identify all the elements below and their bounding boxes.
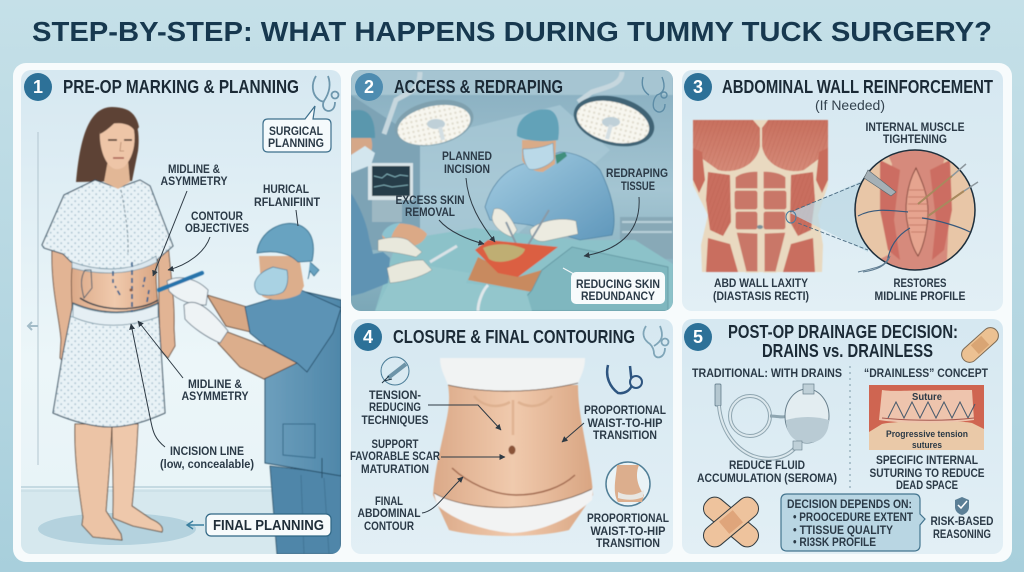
labels: panel 1: CONTOUR [191,211,244,223]
label: risk-based reasoning: RISK-BASED [930,516,994,528]
badge 1: 1 [33,77,43,97]
panel 5: post-op drainage decision [682,319,1003,554]
labels: panel 2: EXCESS SKIN [396,195,464,207]
labels: panel 3: INTERNAL MUSCLE [866,122,965,134]
illustration: surgical drain [715,384,829,459]
icon: bandage [958,324,1002,366]
labels: panel 2 [396,151,668,219]
callout: reducing skin redundancy [571,272,665,304]
labels: panel 5: REDUCE FLUID [729,460,805,472]
callout: decision factors: • RI3SK PROFILE [793,537,876,549]
callout: reducing skin redundancy: REDUNDANCY [581,291,655,303]
labels: panel 1: HURICAL [263,184,309,196]
panel 1: pre-op marking and planning [21,70,341,554]
label: risk-based reasoning: REASONING [933,529,991,541]
labels: panel 2: REMOVAL [405,207,455,219]
icon: stethoscope 2 [642,77,667,112]
illustration: progressive tension sutures [869,385,984,450]
labels: panel 4 [350,390,669,550]
labels: panel 2: PLANNED [442,151,492,163]
illustration: surgeon [159,223,341,554]
labels: panel 4: SUPPORT [372,439,418,451]
callout: reducing skin redundancy: REDUCING SKIN [576,279,660,291]
labels: panel 1: RFLANIFIINT [254,197,320,209]
labels: panel 4: FINAL [375,496,403,508]
zoom connector [786,178,868,252]
callout: decision factors: • TTISSUE QUALITY [793,525,893,537]
illustration: abdominal muscles [693,120,828,272]
labels: panel 1: ASYMMETRY [160,176,228,188]
labels: panel 3: MIDLINE PROFILE [874,291,966,303]
badge 3: 3 [693,77,703,97]
labels: panel 3: RESTORES [894,278,947,290]
badge 5: 5 [693,327,703,347]
labels: panel 4: PROPORTIONAL [587,513,669,525]
labels: panel 3: ABD WALL LAXITY [714,278,808,290]
labels: panel 5 [697,455,985,492]
badge 2 [355,73,383,101]
labels: panel 1: (low, concealable) [160,459,254,471]
labels: panel 1: ASYMMETRY [182,391,249,403]
labels: panel 4: TENSION- [369,390,421,402]
heading 4: CLOSURE & FINAL CONTOURING [393,327,635,347]
callout: decision factors: • PROOCEDURE EXTENT [793,512,913,524]
column headings: TRADITIONAL: WITH DRAINS [692,368,842,380]
callout: final planning: FINAL PLANNING [213,518,324,534]
badge 2: 2 [364,77,374,97]
label: risk-based reasoning [930,516,994,541]
badge 5 [684,323,712,351]
labels: panel 5: SPECIFIC INTERNAL [876,455,978,467]
labels: panel 1: MIDLINE & [188,379,242,391]
badge 1 [24,73,52,101]
labels: panel 5: SUTURING TO REDUCE [870,468,985,480]
icon: crossed bandages [699,493,763,551]
icon: stethoscope 4 [643,326,668,357]
heading 5: DRAINS vs. DRAINLESS [762,341,933,361]
icon: stethoscope 1 [313,76,338,111]
panel 2: access and redraping [351,70,673,311]
arrows: panel 4 leaders [422,405,584,513]
heading 5: POST-OP DRAINAGE DECISION: [728,322,958,342]
illustration: muscle tightening inset [855,150,978,272]
illustration: patient [42,107,175,540]
labels: panel 1: OBJECTIVES [185,223,249,235]
heading 2: ACCESS & REDRAPING [394,77,563,97]
labels: panel 4: FAVORABLE SCAR [350,451,441,463]
callout: surgical planning: SURGICAL [269,126,323,138]
illustration: progressive tension sutures: Suture [912,392,942,403]
labels: panel 3: TIGHTENING [883,134,947,146]
column headings [692,368,988,380]
badge 4: 4 [363,327,373,347]
badge 4 [354,323,382,351]
labels: panel 4: WAIST-TO-HIP [588,418,663,430]
callout: surgical planning [263,106,331,152]
labels: panel 1 [160,164,320,471]
callout: final planning [206,514,331,536]
column headings: “DRAINLESS” CONCEPT [864,368,988,380]
arrows: panel 2 leaders [439,178,639,279]
icon: waist inset [606,462,650,506]
callout: surgical planning: PLANNING [268,138,324,150]
heading 5 [728,322,958,361]
labels: panel 4: ABDOMINAL [358,508,420,520]
icon: check [955,497,969,515]
labels: panel 1: MIDLINE & [168,164,220,176]
labels: panel 1: INCISION LINE [170,446,244,458]
labels: panel 5: ACCUMULATION (SEROMA) [697,473,837,485]
labels: panel 4: WAIST-TO-HIP [590,526,666,538]
badge 3 [684,73,712,101]
labels: panel 3 [713,122,966,303]
labels: panel 4: CONTOUR [364,521,415,533]
icon: stethoscope dark [607,365,642,393]
illustration: progressive tension sutures: sutures [912,440,942,450]
operating room scene [351,70,673,311]
labels: panel 4: MATURATION [361,464,429,476]
subtitle: (If Needed) [815,97,885,113]
labels: panel 3: (DIASTASIS RECTI) [713,291,809,303]
labels: panel 2: INCISION [444,164,490,176]
icon: surgical tool [381,357,409,385]
labels: panel 4: REDUCING [369,402,421,414]
title: STEP-BY-STEP: WHAT HAPPENS DURING TUMMY TUCK SURGERY? [32,16,992,47]
labels: panel 2: REDRAPING [606,168,668,180]
labels: panel 4: TECHNIQUES [362,415,429,427]
arrows: panel 1 leaders [131,191,298,529]
panel 4: closure and final contouring [350,319,673,554]
panel 3: abdominal wall reinforcement [682,70,1003,311]
labels: panel 4: TRANSITION [596,538,660,550]
illustration: abdomen after closure [433,358,593,536]
labels: panel 2: TISSUE [621,181,655,193]
illustration: progressive tension sutures: Progressive tension [886,429,968,440]
labels: panel 4: PROPORTIONAL [584,405,666,417]
callout: decision factors [781,494,925,551]
heading 1: PRE-OP MARKING & PLANNING [63,77,299,97]
labels: panel 5: DEAD SPACE [896,480,958,492]
callout: decision factors: DECISION DEPENDS ON: [787,499,912,511]
labels: panel 4: TRANSITION [593,430,657,442]
